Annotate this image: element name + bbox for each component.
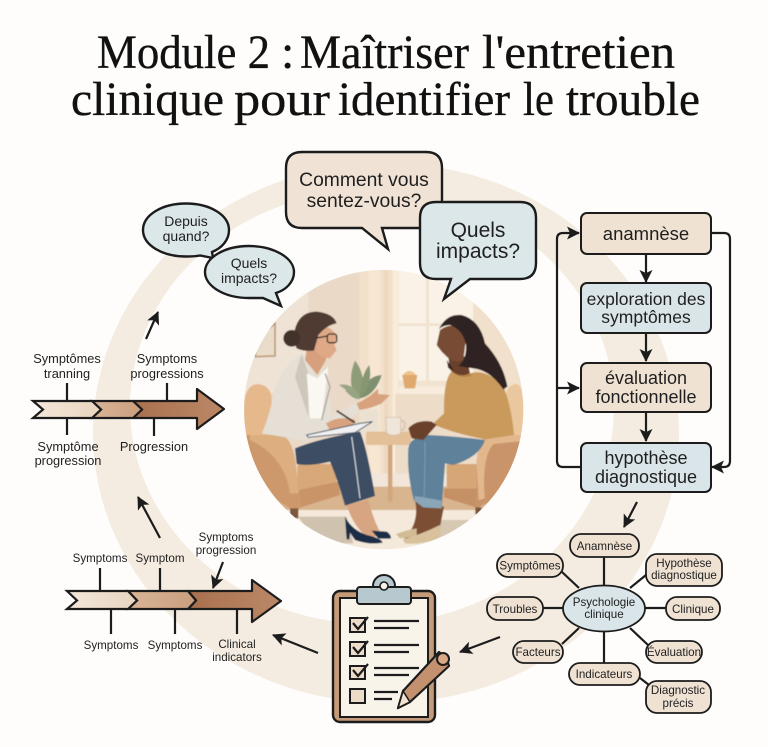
step: exploration des symptômes (581, 283, 711, 333)
curtain (368, 270, 399, 474)
patient lower legs (403, 500, 444, 540)
glasses (317, 336, 327, 338)
decorative ring (93, 163, 679, 703)
title: Module 2 (97, 26, 270, 79)
title: : (281, 26, 294, 79)
lower timeline arrow (188, 580, 281, 622)
illustration: clinical interview (240, 260, 530, 550)
upper timeline labels: Progression (120, 439, 188, 454)
title: pour (234, 73, 330, 126)
lower timeline labels: indicators (212, 651, 262, 664)
step: hypothèse diagnostique (581, 443, 711, 492)
window (395, 270, 475, 394)
right armchair (444, 384, 527, 515)
side table left (249, 447, 278, 498)
title: le (523, 73, 554, 126)
node: anamnèse (570, 534, 639, 557)
speech bubble: quels impacts small: Quels (231, 255, 267, 271)
speech bubble: depuis quand: Depuis (164, 213, 208, 229)
node: hypothèse diagnostique: diagnostique (651, 569, 717, 582)
sweater (433, 370, 514, 439)
coffee table and mug (366, 417, 411, 502)
speech bubble: comment vous sentez-vous (286, 152, 442, 249)
lower timeline labels: Symptoms (73, 552, 128, 565)
node: évaluation (646, 641, 702, 663)
jacket (262, 354, 360, 442)
therapist shoes (345, 517, 383, 544)
node: hypothèse diagnostique: Hypothèse (656, 557, 712, 570)
node: anamnèse: Anamnèse (577, 540, 632, 553)
hair (293, 312, 337, 351)
picture frame (255, 323, 275, 357)
node: center: Psychologie (573, 596, 635, 609)
arrow: lower to upper timeline (138, 497, 160, 538)
floor (277, 473, 488, 550)
title: identifier (338, 73, 510, 126)
raised hand (357, 388, 390, 410)
patient (396, 315, 514, 544)
title: Maîtriser (300, 26, 469, 79)
speech bubble: depuis quand (143, 204, 229, 258)
node: clinique: Clinique (672, 603, 714, 616)
small pot on sill (402, 371, 417, 388)
node: indicateurs (569, 663, 640, 685)
arrow: clipboard to timeline (273, 635, 318, 653)
flowchart (557, 213, 730, 492)
mind map (487, 534, 722, 713)
speech bubble: quels impacts large: Quels (451, 219, 505, 242)
writing hand (326, 418, 355, 431)
upper timeline labels (33, 351, 204, 468)
patient hands (408, 421, 437, 440)
step arrows (645, 254, 647, 282)
clipboard checklist icon (333, 575, 449, 722)
speech bubble: comment vous sentez-vous: Comment vous (299, 170, 429, 191)
lower timeline labels: Symptoms (84, 639, 139, 652)
node: center (563, 586, 645, 632)
speech bubble: quels impacts large (420, 202, 536, 299)
clipboard on lap (307, 422, 372, 437)
upper timeline labels: tranning (44, 366, 90, 381)
step: évaluation fonctionnelle (581, 363, 711, 412)
node: diagnostic précis (646, 681, 711, 713)
loop connectors (557, 233, 581, 467)
arrow: mind map to clipboard (460, 637, 500, 652)
speech bubble: comment vous sentez-vous: sentez-vous? (307, 191, 421, 212)
lower timeline labels: Symptoms (199, 531, 254, 544)
step: hypothèse diagnostique: hypothèse (604, 448, 688, 468)
node: évaluation: Évaluation (647, 646, 701, 659)
node: indicateurs: Indicateurs (576, 668, 633, 681)
patient shoes (396, 528, 417, 538)
title: l'entretien (482, 26, 675, 79)
upper timeline labels: Symptôme (37, 439, 99, 454)
lower timeline (67, 531, 281, 664)
therapist (262, 312, 391, 544)
step: hypothèse diagnostique: diagnostique (595, 467, 697, 487)
node: facteurs: Facteurs (515, 646, 561, 659)
lower timeline labels: Symptoms (148, 639, 203, 652)
step: évaluation fonctionnelle: évaluation (605, 368, 687, 388)
upper timeline arrow (133, 389, 224, 429)
speech bubble: depuis quand: quand? (163, 228, 210, 244)
upper timeline labels: Symptoms (137, 351, 197, 366)
node: facteurs (513, 641, 563, 663)
lower timeline labels: progression (196, 544, 256, 557)
neck and face (304, 350, 326, 375)
node: troubles: Troubles (493, 603, 538, 616)
patient neck and face (448, 357, 470, 375)
title (71, 26, 700, 126)
arrow: up to bubbles (146, 312, 158, 339)
step: anamnèse: anamnèse (603, 223, 689, 244)
title: trouble (566, 73, 700, 126)
speech bubble: quels impacts large: impacts? (436, 240, 520, 263)
node: clinique (666, 597, 720, 620)
step: anamnèse (581, 213, 711, 254)
upper timeline (33, 351, 224, 468)
left armchair (243, 384, 340, 518)
arrow: flowchart to mind map (624, 502, 637, 527)
patient hair (439, 315, 507, 389)
upper timeline labels: Symptômes (33, 351, 101, 366)
therapist legs (347, 500, 382, 538)
jeans (408, 435, 485, 508)
upper timeline labels: progression (35, 453, 101, 468)
node: symptômes: Symptômes (499, 560, 561, 572)
step: exploration des symptômes: symptômes (601, 307, 691, 327)
step: évaluation fonctionnelle: fonctionnelle (595, 387, 697, 407)
pencil (398, 652, 449, 708)
node: troubles (487, 597, 543, 620)
upper timeline labels: progressions (130, 366, 204, 381)
node: hypothèse diagnostique (646, 554, 722, 586)
lower timeline labels (73, 531, 262, 664)
lower timeline labels: Clinical (218, 638, 256, 651)
node: diagnostic précis: Diagnostic (651, 684, 705, 697)
plant and pot (339, 361, 382, 435)
title: clinique (71, 73, 224, 126)
step: exploration des symptômes: exploration des (587, 289, 706, 309)
node: diagnostic précis: précis (663, 697, 694, 710)
lower timeline labels: Symptom (136, 552, 184, 565)
speech bubble: quels impacts small (205, 246, 294, 306)
speech bubble: quels impacts small: impacts? (221, 270, 277, 286)
node: symptômes (497, 554, 563, 577)
node: center: clinique (584, 608, 624, 621)
